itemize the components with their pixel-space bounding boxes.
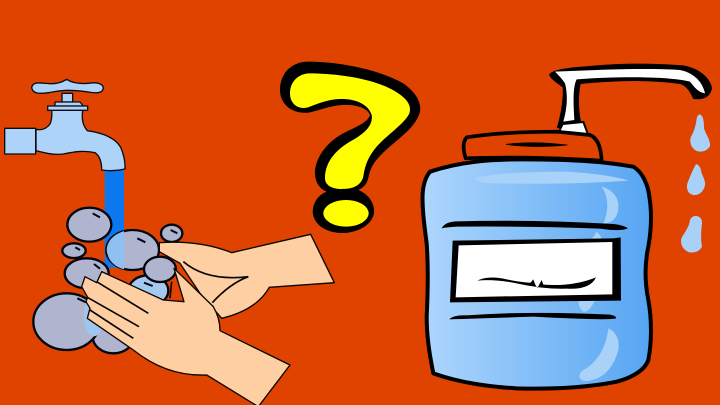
water stream [105, 169, 124, 268]
bottle stripes [442, 221, 628, 319]
icon: faucet [5, 79, 125, 171]
soap bubbles [33, 208, 182, 353]
question mark fill [290, 73, 410, 189]
question mark dot [323, 200, 369, 227]
bottle body [423, 159, 651, 389]
question mark outline [280, 62, 420, 233]
soap drops [681, 114, 710, 252]
icon: back hand [159, 234, 334, 318]
icon: faucet and hands [5, 79, 334, 405]
finger lines [87, 262, 248, 338]
bottle highlights [474, 172, 629, 381]
icon: soap dispenser [423, 64, 712, 389]
bubble over back hand [144, 257, 176, 282]
label [450, 237, 621, 302]
pump spout [549, 64, 712, 128]
bottle cap [464, 132, 602, 161]
pump base [559, 122, 588, 134]
cap line [506, 143, 567, 147]
icon: front hand [82, 268, 290, 405]
icon: question mark [280, 62, 420, 233]
